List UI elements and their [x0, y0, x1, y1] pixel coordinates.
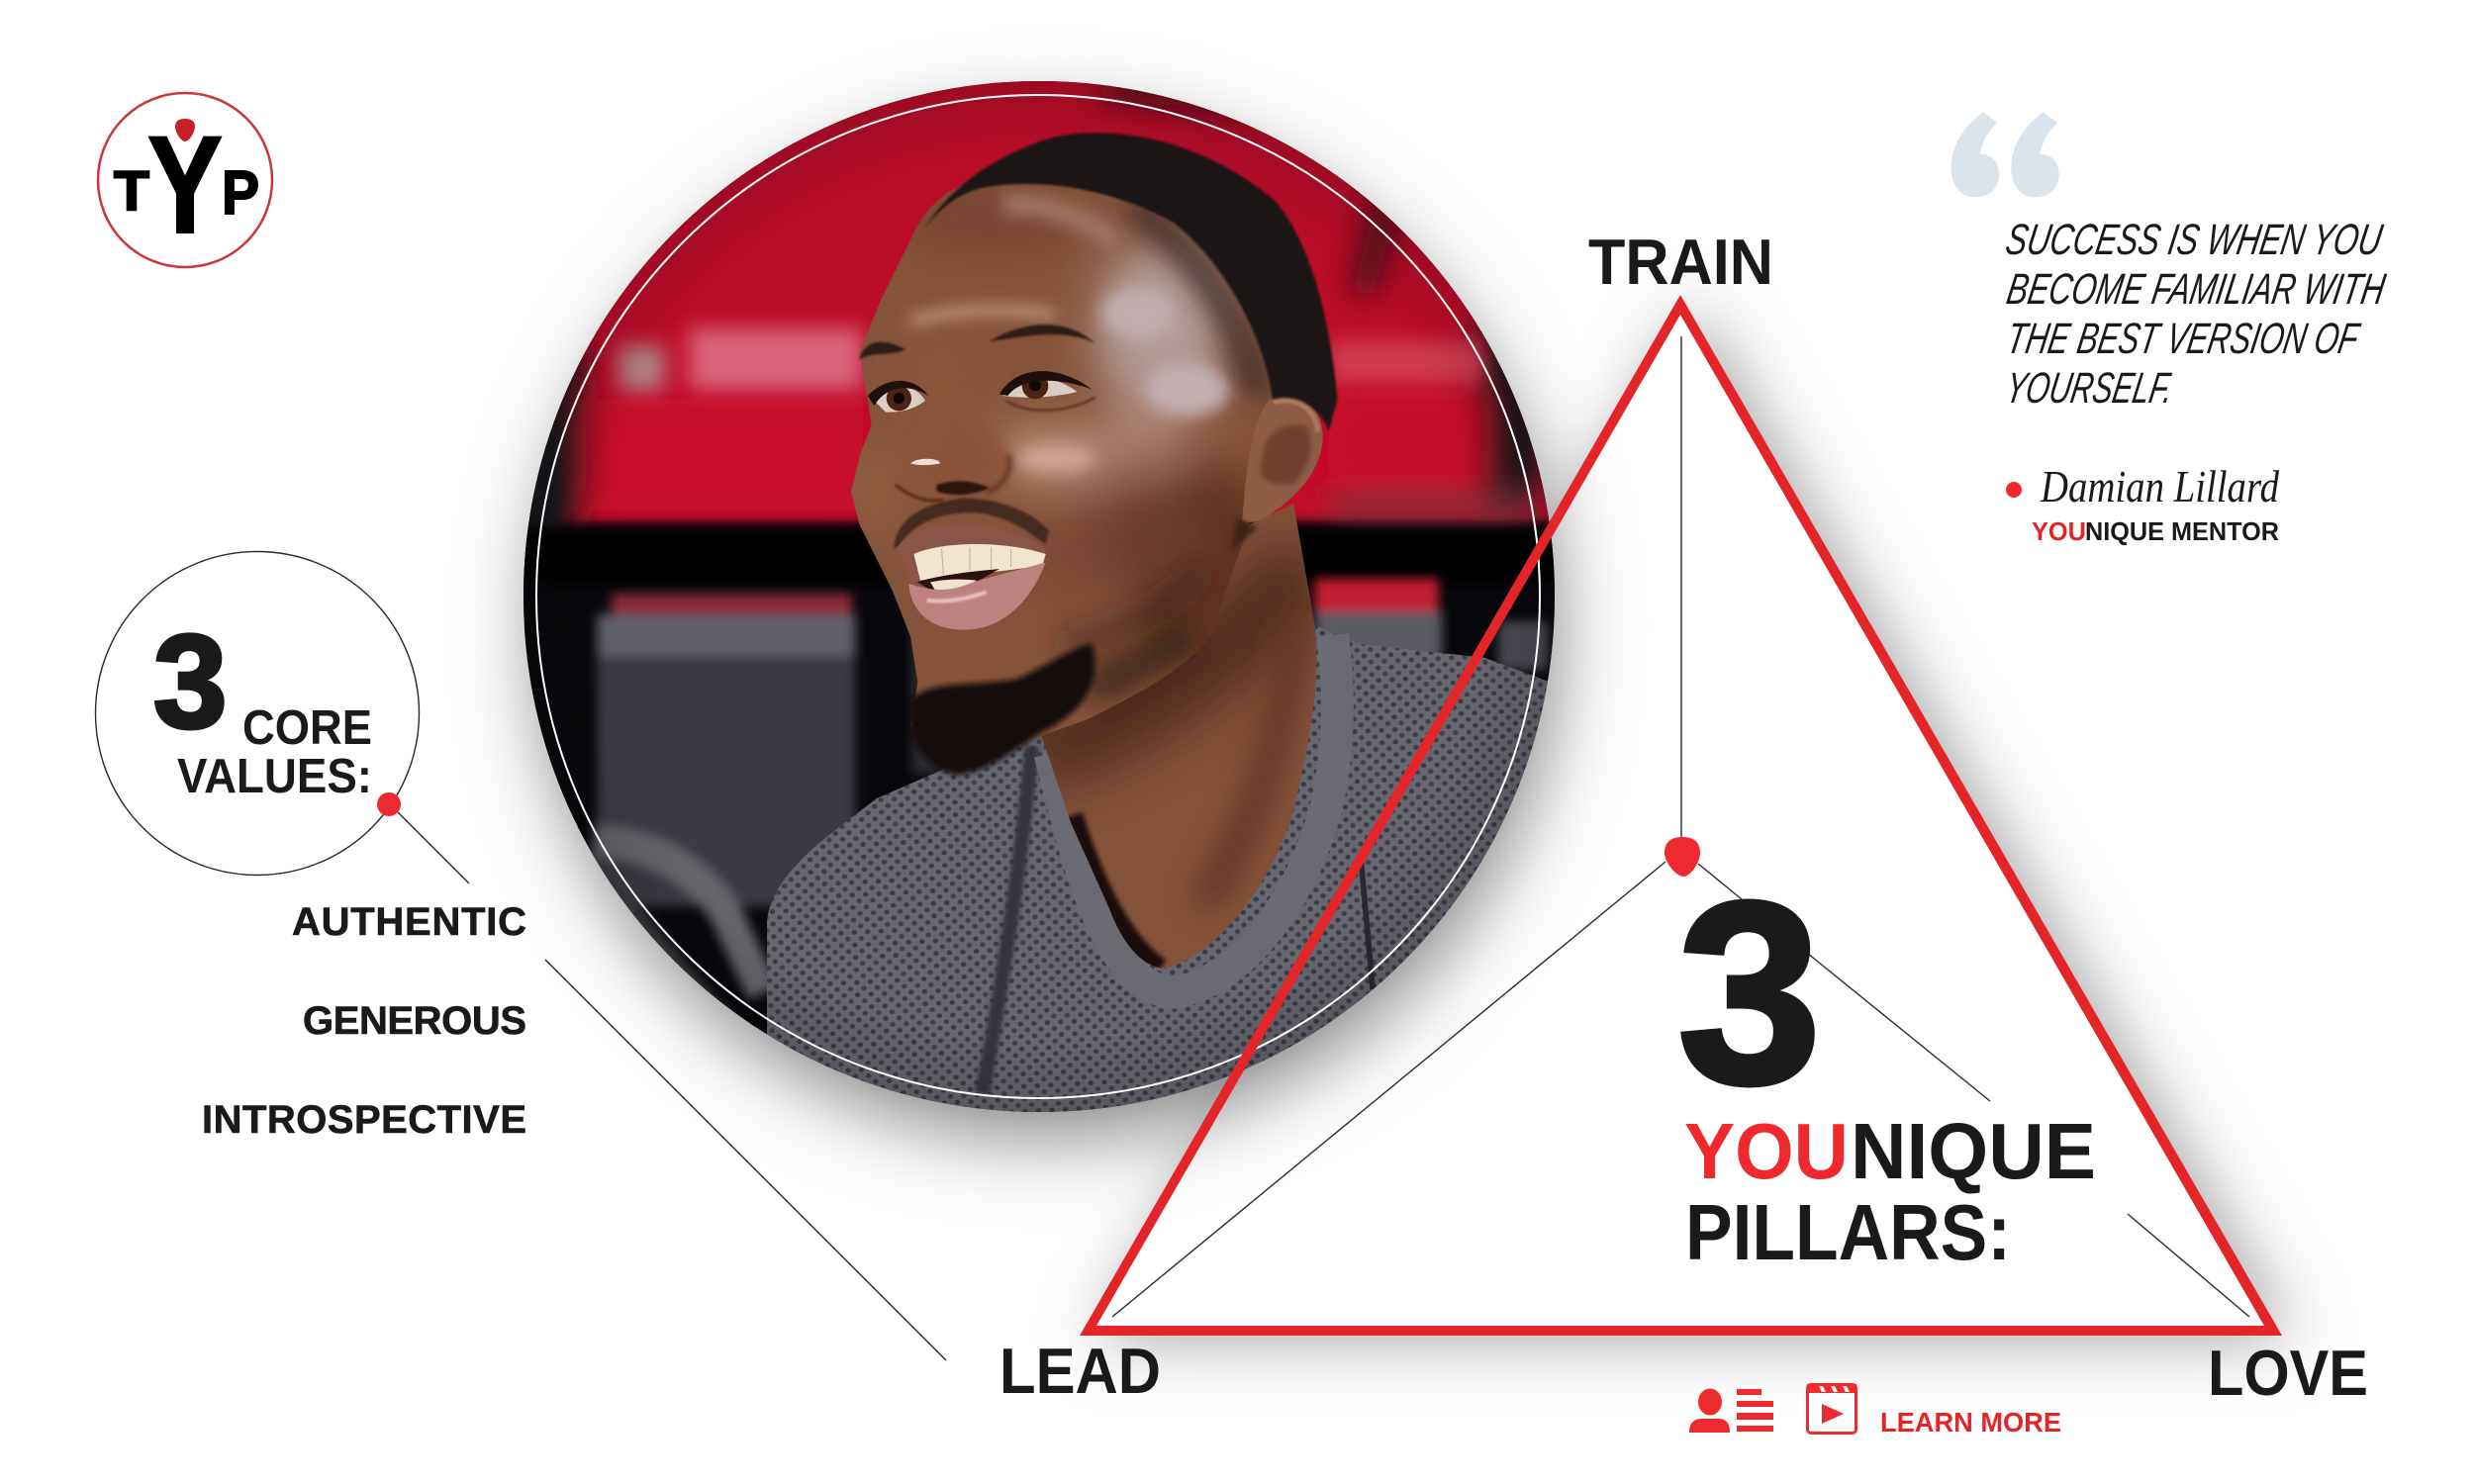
quote attribution	[2006, 461, 2280, 546]
core values heading: VALUES:	[177, 750, 372, 803]
icon: video	[1807, 1384, 1856, 1433]
core values list: INTROSPECTIVE	[202, 1098, 526, 1142]
logo: TYP: T	[114, 159, 149, 223]
photo: moustache and mouth	[894, 498, 1049, 630]
photo: nose	[896, 389, 1009, 501]
triangle shadow	[1094, 301, 2296, 1342]
icon: quotation mark	[1951, 112, 2059, 197]
portrait photo: smiling man in grey shirt	[523, 81, 1555, 1112]
triangle white interior	[1080, 295, 2282, 1336]
red triangle outline	[1080, 295, 2282, 1336]
photo: ear	[1232, 395, 1323, 551]
photo: hair	[924, 133, 1337, 430]
photo shadow	[540, 122, 1554, 1135]
quote attribution: NIQUE MENTOR	[2085, 516, 2279, 546]
quote text	[2002, 216, 2390, 413]
label: TRAIN: TRAIN	[1588, 226, 1773, 298]
photo: collar	[1050, 635, 1337, 993]
label: LEAD: LEAD	[999, 1335, 1161, 1407]
heading: 3 younique pillars: 3	[1677, 848, 1822, 1138]
photo thin white ring	[536, 95, 1540, 1098]
logo: TYP	[98, 93, 272, 267]
panel: quote	[1951, 112, 2390, 546]
heading: 3 younique pillars: NIQUE	[1851, 1107, 2096, 1195]
core values heading: 3	[153, 608, 228, 756]
heading: 3 younique pillars: PILLARS:	[1685, 1188, 2011, 1276]
label: LOVE: LOVE	[2208, 1337, 2368, 1409]
quote text: YOURSELF.	[2002, 364, 2177, 413]
core values connector lines	[398, 812, 946, 1360]
learn more link: LEARN MORE	[1880, 1407, 2061, 1438]
logo: TYP: Y	[147, 107, 223, 262]
core values red dot	[377, 792, 401, 816]
photo background: blurred arena seats	[523, 81, 1555, 1112]
photo: grey dotted shirt	[767, 504, 1548, 1112]
core values circle	[95, 552, 420, 875]
icon: profile	[1689, 1389, 1773, 1433]
logo: TYP: P	[222, 159, 259, 228]
learn more row	[1689, 1384, 2061, 1438]
photo: eyes	[868, 371, 1095, 413]
quote attribution: Damian Lillard	[2040, 461, 2280, 511]
heading: 3 younique pillars: YOU	[1684, 1107, 1849, 1195]
core values heading	[153, 608, 372, 803]
red teardrop at triangle centre	[1665, 837, 1700, 877]
quote attribution: YOU	[2032, 516, 2086, 546]
core values list: AUTHENTIC	[292, 900, 526, 944]
pillar connector lines	[1112, 336, 2249, 1317]
photo: temple fade	[1128, 191, 1277, 406]
core values heading: CORE	[242, 701, 372, 755]
photo: beard	[908, 571, 1204, 775]
panel: 3 core values	[95, 552, 946, 1360]
photo: neck	[1039, 504, 1316, 969]
heading: 3 younique pillars	[1677, 848, 2096, 1276]
photo: face	[851, 169, 1323, 775]
photo: eyebrows	[859, 325, 1095, 359]
core values list: GENEROUS	[303, 999, 526, 1043]
core values list	[202, 900, 526, 1142]
